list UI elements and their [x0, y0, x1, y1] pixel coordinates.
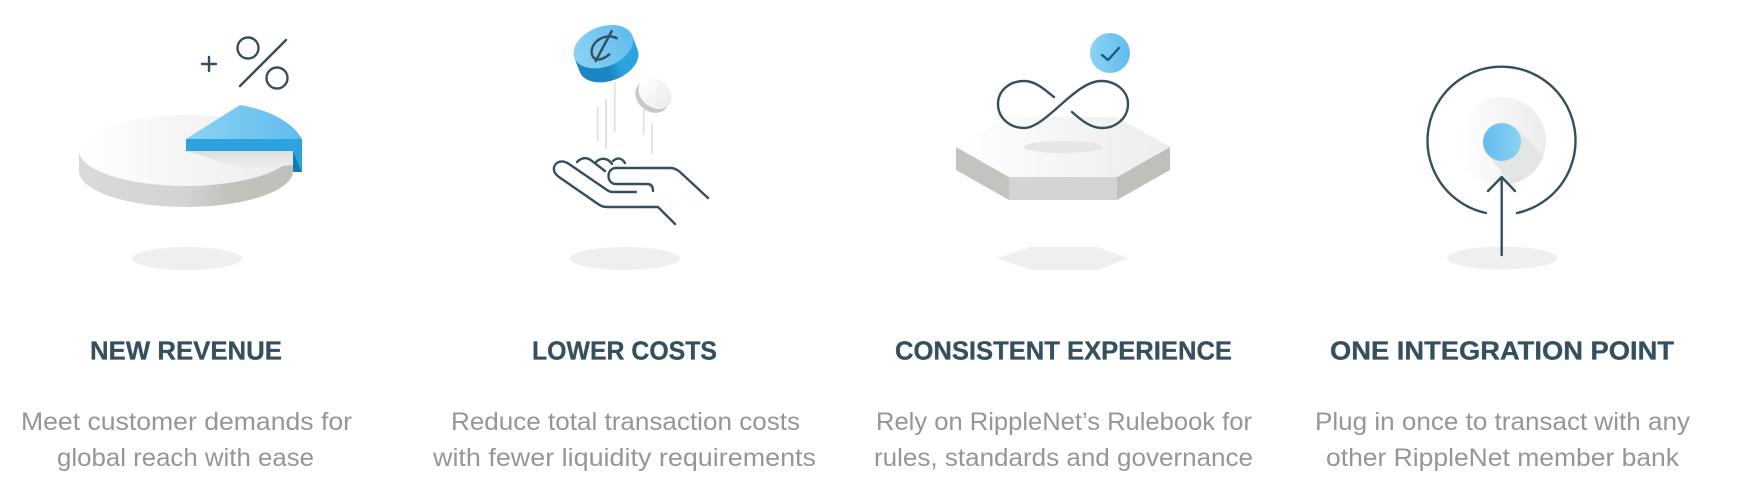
description: Rely on RippleNet’s Rulebook for [876, 408, 1252, 436]
icon: hexagon platform [956, 117, 1170, 200]
heading: ONE INTEGRATION POINT [1330, 336, 1674, 366]
description [21, 408, 352, 472]
icon: check badge [1090, 33, 1130, 73]
panel: new revenue [21, 38, 352, 472]
panel: lower costs [432, 17, 816, 472]
slice right edge [293, 151, 302, 172]
ground shadow [1447, 246, 1557, 270]
icon: white coin [629, 71, 678, 119]
ground shadow [132, 247, 242, 270]
heading: CONSISTENT EXPERIENCE [895, 336, 1232, 366]
heading: NEW REVENUE [90, 336, 282, 366]
slice front edge [186, 139, 302, 151]
icon: arrow up [1488, 177, 1515, 255]
description: other RippleNet member bank [1326, 444, 1680, 472]
heading: LOWER COSTS [532, 336, 717, 366]
icon: blue dot [1483, 123, 1521, 161]
icon: open hand [554, 158, 708, 224]
icon: plus percent [202, 38, 288, 88]
description: rules, standards and governance [874, 444, 1253, 472]
description: with fewer liquidity requirements [432, 444, 816, 472]
slice shadow [186, 151, 293, 168]
description [874, 408, 1253, 472]
ground shadow [570, 247, 680, 270]
raised blue slice [186, 105, 302, 139]
description [1315, 408, 1691, 472]
icon: pie chart [79, 105, 302, 207]
description: Reduce total transaction costs [451, 408, 800, 436]
slice dark edge [293, 151, 302, 172]
icon: grey disc [1489, 97, 1546, 185]
pie top face [79, 115, 293, 186]
panel: one integration point [1315, 67, 1691, 472]
icon: falling trails [598, 82, 652, 154]
icon: infinity loop [998, 81, 1128, 128]
pie base side [79, 150, 293, 207]
description: global reach with ease [57, 444, 314, 472]
panel: consistent experience [874, 33, 1253, 472]
description: Plug in once to transact with any [1315, 408, 1691, 436]
description: Meet customer demands for [21, 408, 352, 436]
description [432, 408, 816, 472]
icon: outer ring [1427, 67, 1576, 213]
ground shadow [997, 247, 1129, 270]
icon: blue coin [567, 17, 645, 90]
